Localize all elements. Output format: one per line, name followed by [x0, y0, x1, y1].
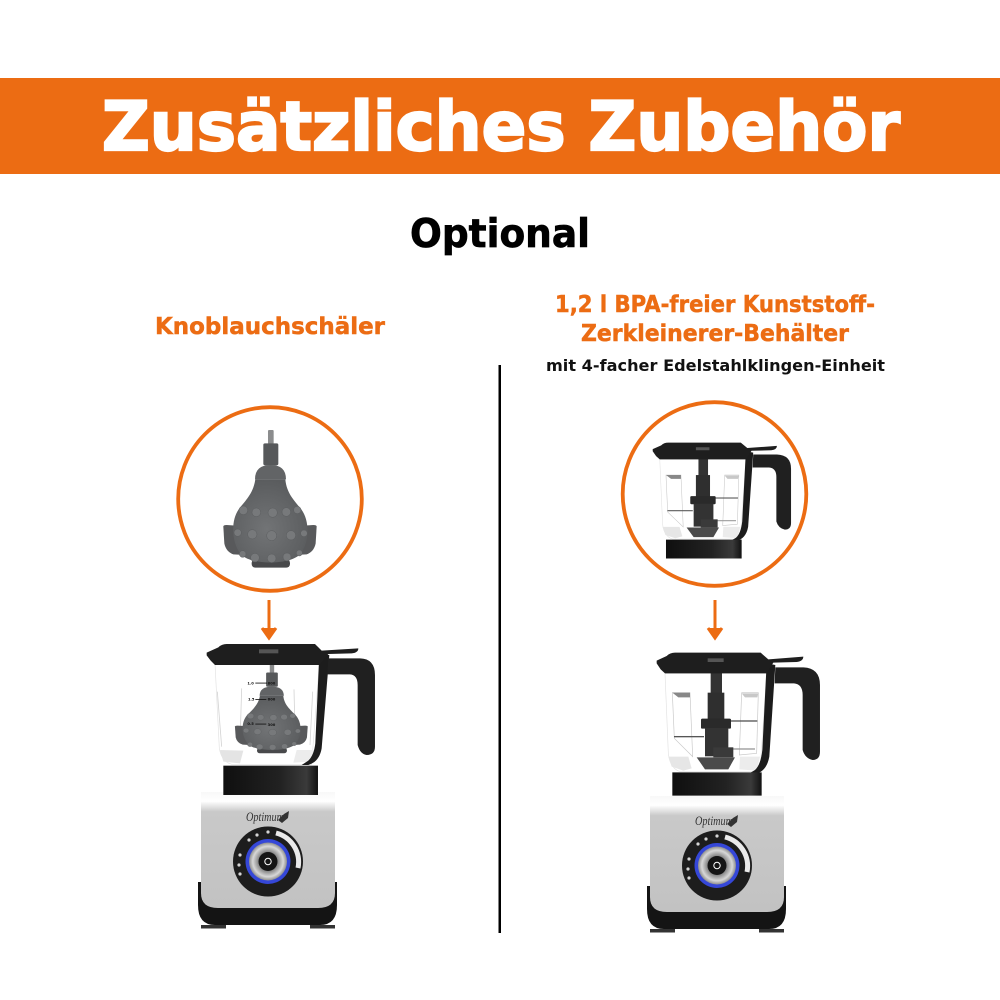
divider — [498, 365, 501, 933]
jar with peeler: 1.0 — [247, 682, 254, 686]
jar with peeler: 300 — [268, 723, 276, 727]
jar with peeler: 1.5 — [248, 697, 255, 701]
jar with peeler — [207, 644, 375, 795]
panel: garlic peeler — [155, 314, 386, 928]
title banner — [0, 78, 1000, 174]
arrow: chopper into blender — [708, 600, 722, 638]
panel: chopper bowl — [546, 292, 885, 932]
arrow: peeler into jar — [262, 600, 276, 638]
jar with peeler: 800 — [268, 682, 276, 686]
blender with peeler — [198, 644, 375, 928]
title banner: Zusätzliches Zubehör — [102, 88, 900, 167]
heading: garlic peeler: Knoblauchschäler — [155, 314, 386, 340]
heading: chopper bowl: Zerkleinerer-Behälter — [581, 321, 850, 347]
jar with peeler: 0.5 — [247, 722, 254, 726]
heading: chopper bowl: 1,2 l BPA-freier Kunststoff- — [555, 292, 875, 318]
blender with chopper — [647, 653, 820, 932]
circle with peeler — [178, 407, 362, 591]
subheading: blade unit: mit 4-facher Edelstahlklingen-Einheit — [546, 356, 885, 375]
circle with chopper jar — [623, 402, 806, 586]
jar with peeler: 600 — [268, 698, 276, 702]
heading: chopper bowl — [555, 292, 875, 347]
heading: optional: Optional — [410, 212, 590, 257]
